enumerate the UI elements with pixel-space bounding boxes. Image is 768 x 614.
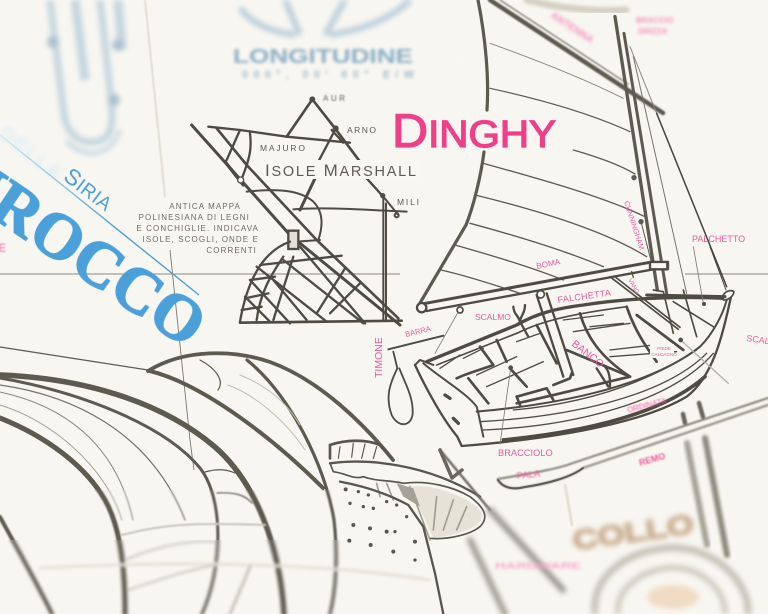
heading: longitudine: 000°, 00' 00" E/W <box>242 69 415 81</box>
oar <box>498 398 768 488</box>
text: map caption: E CONCHIGLIE. INDICAVA <box>136 224 259 233</box>
heading: longitudine <box>233 46 415 81</box>
label: ordinata: ORDINATA <box>626 396 668 415</box>
boat hull <box>388 247 734 446</box>
label: falchetta: FALCHETTA <box>557 288 612 305</box>
map labels: MAJURO <box>260 143 305 153</box>
label: banco: BANCO <box>569 338 606 370</box>
heading: della siria <box>0 123 118 216</box>
label: pala: PALA <box>516 469 541 482</box>
heading: longitudine: LONGITUDINE <box>233 46 413 68</box>
bottom blurred sketch curves <box>0 347 430 614</box>
label: piede calcagno <box>650 344 677 358</box>
map labels <box>260 94 419 207</box>
chart: Marshall Islands stick map <box>192 96 407 325</box>
central shell box <box>288 231 298 249</box>
top frame <box>208 99 382 210</box>
label: vang: VANG <box>626 278 640 296</box>
map labels: ISOLE MARSHALL <box>265 161 416 180</box>
gaff <box>490 0 663 113</box>
label: bracco drizza <box>636 16 673 36</box>
strakes <box>480 350 713 430</box>
boat sail <box>420 0 727 303</box>
leader lines <box>435 312 511 444</box>
pink labels <box>373 10 768 571</box>
tiller <box>388 336 443 349</box>
heading: dinghy: DINGHY <box>392 104 556 157</box>
oarlocks <box>513 305 528 337</box>
label: timone: TIMONE <box>373 337 385 378</box>
main diagonal sticks <box>192 125 400 325</box>
stern stick <box>610 276 680 329</box>
label: bracco drizza: BRACCIO <box>636 16 673 25</box>
map labels: ARNO <box>347 125 376 135</box>
transom <box>415 360 483 437</box>
construction lines <box>0 0 768 470</box>
label: cunningham: CUNNINGHAM <box>622 200 646 251</box>
label: piede calcagno: PIEDE <box>657 346 671 351</box>
centre arcs <box>247 190 407 319</box>
gunwale <box>427 297 727 362</box>
thwart post <box>537 293 573 377</box>
label: bracco drizza: DRIZZA <box>638 27 668 36</box>
title: isole marshall <box>262 160 418 179</box>
text: map caption: ISOLE, SCOGLI, ONDE E <box>143 235 259 244</box>
text: map caption: POLINESIANA DI LEGNI <box>139 213 250 222</box>
sail edge <box>420 0 488 303</box>
icon: blurred blue fan <box>240 0 410 35</box>
sail battens <box>441 43 647 293</box>
mast <box>615 17 727 293</box>
mast head blur <box>527 0 626 11</box>
map labels: AUR <box>323 94 345 103</box>
oar shaft stripes <box>565 403 727 555</box>
label: remo: REMO <box>638 451 667 468</box>
map labels: MILI <box>397 197 419 207</box>
heading: collo: COLLO <box>571 508 696 556</box>
icon: long spike <box>440 450 563 614</box>
heading: della siria: SIRIA <box>59 162 118 216</box>
hull outer <box>415 293 732 446</box>
icon: ship hat detail <box>330 441 485 614</box>
label: bracciolo: BRACCIOLO <box>498 448 553 458</box>
label: scalmo: SCALMO <box>475 312 511 322</box>
lattice <box>240 242 402 323</box>
icon: blurred ring <box>595 548 748 614</box>
label: piede calcagno: CALCAGNO <box>651 352 677 357</box>
ribs and floorboards <box>457 307 683 405</box>
boom <box>417 262 667 312</box>
label: barra: BARRA <box>404 324 432 339</box>
label: palchetto: PALCHETTO <box>692 234 745 244</box>
icon: blurred blue paperclip sketch <box>47 0 124 153</box>
text: map caption: ANTICA MAPPA <box>169 202 241 211</box>
text: map caption <box>136 202 259 255</box>
label: boma: BOMA <box>536 257 562 271</box>
label: hardware blurred: HARDWARE <box>495 561 581 571</box>
label: antenna: ANTENNA <box>548 10 595 46</box>
text: map caption: CORRENTI <box>206 246 257 255</box>
